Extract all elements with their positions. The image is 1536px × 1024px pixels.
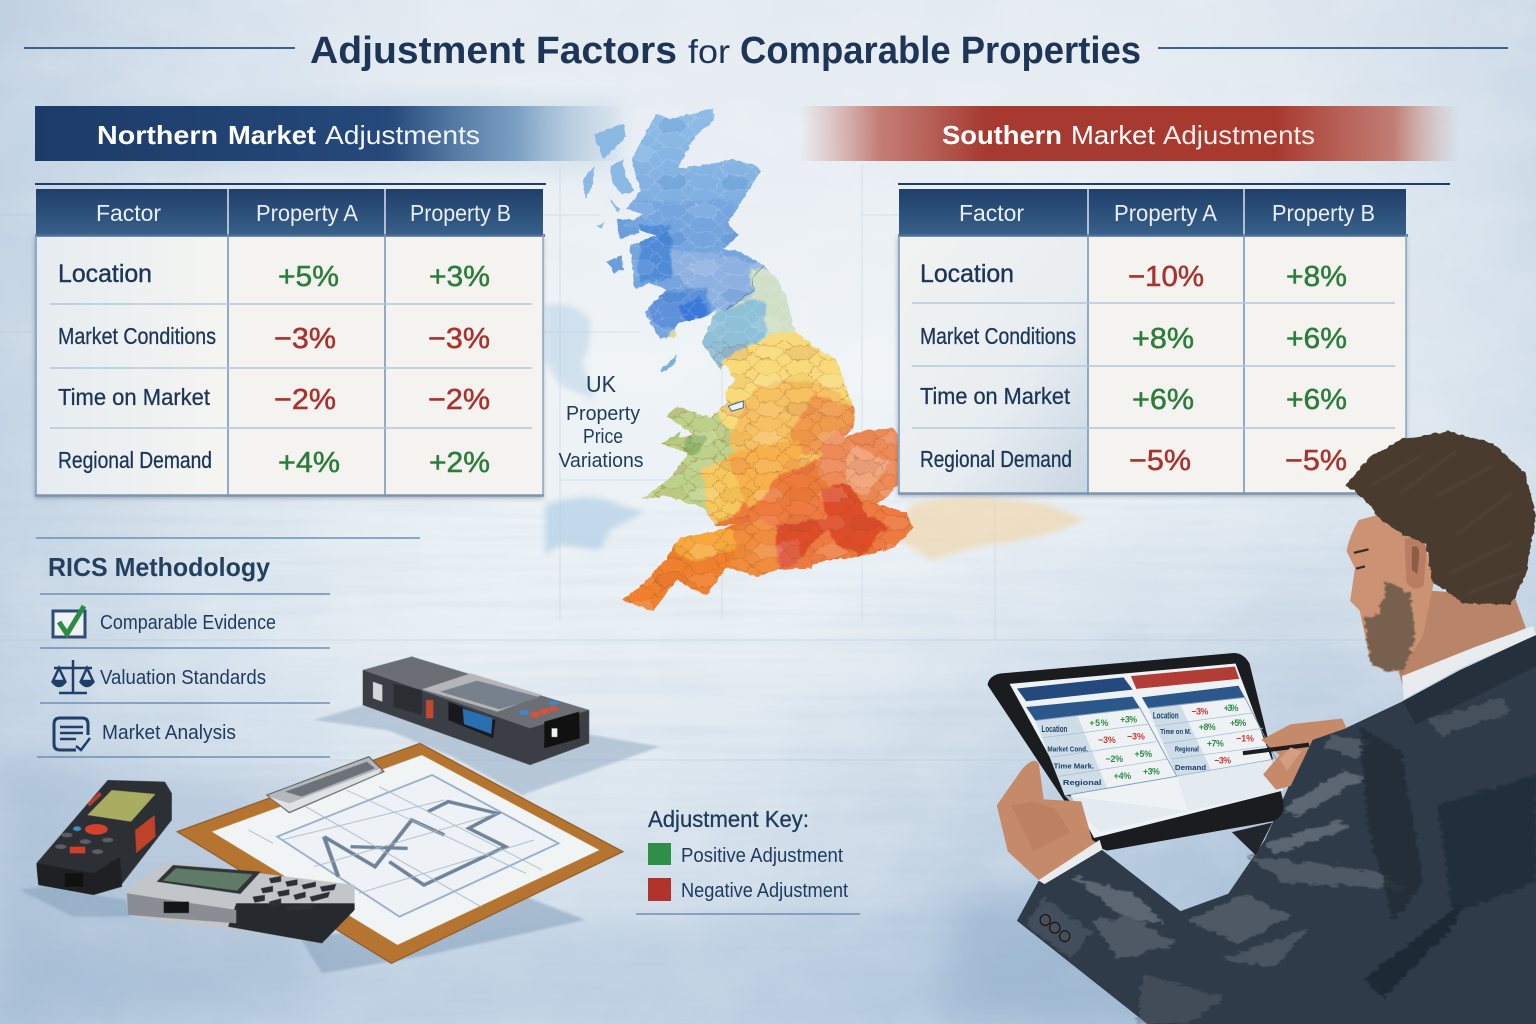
tablet screen: +8%	[1199, 722, 1216, 732]
banner: Northern Market Adjustments: Market	[228, 120, 316, 150]
shirt cuff	[1038, 840, 1103, 884]
tablet screen: Location	[1153, 710, 1179, 721]
row: Location: Location	[920, 260, 1014, 288]
banner: Southern Market Adjustments: Adjustments	[1163, 120, 1315, 150]
handheld device left	[36, 780, 172, 895]
row: Location: −10%	[1128, 261, 1204, 293]
tablet screen: +3%	[1120, 714, 1137, 724]
row: Regional Demand	[58, 447, 490, 479]
left hand	[997, 761, 1101, 880]
ireland and europe washes	[545, 304, 1085, 560]
map label: UK Property Price Variations: Price	[583, 426, 623, 448]
tablet screen: +4%	[1114, 771, 1131, 781]
county mesh	[624, 114, 911, 611]
row: Time on Market: +6%	[1132, 384, 1194, 416]
row: Location: +3%	[429, 261, 490, 293]
row: Time on Market	[920, 383, 1347, 416]
banner: Northern Market Adjustments: Adjustments	[325, 120, 480, 150]
panel: adjustment key: Positive Adjustment	[681, 845, 843, 867]
icon: scales	[52, 660, 94, 693]
tablet screen: −3%	[1127, 732, 1145, 742]
key swatch: negative	[648, 878, 671, 901]
panel: RICS methodology: RICS Methodology	[48, 552, 271, 582]
banner: Southern Market Adjustments	[800, 106, 1460, 161]
title: Adjustment Factors	[310, 30, 677, 72]
panel: RICS methodology	[36, 538, 420, 757]
table header	[898, 189, 1408, 236]
banner: Southern Market Adjustments: Southern	[942, 120, 1062, 150]
tablet screen: −2%	[1105, 754, 1123, 764]
tablet screen: Location	[1042, 724, 1067, 734]
shadows	[20, 703, 660, 973]
beard	[1364, 582, 1416, 672]
row: Regional Demand: +2%	[429, 447, 490, 479]
row: Market Conditions: −3%	[428, 323, 490, 355]
tablet screen: +7%	[1207, 738, 1224, 749]
key swatch: positive	[648, 843, 671, 865]
row: Location	[58, 260, 490, 293]
tablet screen: −3%	[1191, 706, 1208, 717]
row: Market Conditions: +6%	[1286, 323, 1347, 355]
row: Time on Market: +6%	[1286, 384, 1347, 416]
suit	[1017, 635, 1536, 1024]
table header: Factor	[959, 200, 1024, 226]
table header: Property B	[410, 200, 511, 226]
hair	[1346, 432, 1536, 605]
shirt collar	[1402, 626, 1536, 699]
row: Market Conditions: +8%	[1132, 323, 1194, 355]
tablet screen: +3%	[1224, 703, 1238, 713]
tablet screen	[1010, 663, 1283, 838]
tablet screen: Market Cond.	[1047, 744, 1088, 753]
table header: Property A	[256, 200, 359, 226]
tablet screen: Regional	[1063, 778, 1101, 787]
row: Location: +8%	[1286, 261, 1347, 293]
row: Time on Market: −2%	[274, 384, 336, 416]
tablet screen: +5%	[1135, 749, 1152, 759]
tablet screen: +3%	[1143, 766, 1160, 776]
row: Time on Market: −2%	[428, 384, 490, 416]
ear	[1405, 537, 1427, 589]
row: Location	[920, 260, 1347, 293]
row: Regional Demand	[920, 445, 1347, 477]
row: Location: Location	[58, 260, 152, 288]
banner: Northern Market Adjustments	[35, 106, 625, 161]
panel: adjustment key: Adjustment Key:	[648, 806, 809, 832]
panel: adjustment key: Negative Adjustment	[681, 880, 848, 902]
row: Market Conditions	[58, 323, 490, 355]
tablet screen: +5%	[1089, 718, 1108, 728]
illustration: man with tablet	[988, 432, 1536, 1024]
tablet screen: +5%	[1230, 718, 1246, 728]
banner: Northern Market Adjustments: Northern	[97, 120, 218, 150]
map label: UK Property Price Variations: Property	[566, 403, 640, 425]
row: Market Conditions: −3%	[274, 323, 336, 355]
row: Time on Market: Time on Market	[58, 384, 211, 410]
row: Time on Market: Time on Market	[920, 383, 1071, 409]
row: Regional Demand: −5%	[1285, 445, 1347, 477]
row: Market Conditions	[920, 323, 1347, 355]
table header	[35, 189, 545, 236]
panel: RICS methodology: Comparable Evidence	[100, 612, 276, 634]
panel: northern adjustments table	[35, 184, 546, 496]
tablet screen: Demand	[1175, 763, 1207, 772]
row: Regional Demand: −5%	[1129, 445, 1191, 477]
neck and face	[1347, 512, 1526, 686]
row: Time on Market	[58, 384, 490, 416]
icon: checkbox	[53, 606, 85, 637]
illustration: surveying tools and floor plan	[20, 657, 660, 973]
row: Market Conditions: Market Conditions	[58, 323, 216, 349]
tablet	[988, 653, 1284, 855]
panel: RICS methodology: Market Analysis	[102, 722, 236, 744]
panel: RICS methodology: Valuation Standards	[100, 667, 266, 689]
row: Location: +5%	[278, 261, 339, 293]
title: Comparable Properties	[740, 30, 1141, 72]
banner: Southern Market Adjustments: Market	[1071, 120, 1156, 150]
table header: Property A	[1114, 200, 1218, 226]
tablet screen: Time on M.	[1160, 727, 1191, 736]
clip	[267, 757, 384, 813]
panel: UK map	[545, 90, 1085, 621]
calculator device	[126, 862, 355, 943]
map label: UK Property Price Variations: UK	[586, 371, 617, 397]
row: Regional Demand: Regional Demand	[58, 447, 212, 473]
icon: document	[54, 718, 90, 750]
map label: UK Property Price Variations: Variations	[558, 450, 644, 472]
tablet screen: −3%	[1214, 755, 1231, 766]
panel: adjustment key	[636, 806, 860, 914]
title	[24, 30, 1508, 72]
tablet screen: Time Mark.	[1054, 761, 1094, 771]
clipboard with floor plan	[177, 743, 623, 963]
table header: Property B	[1272, 200, 1375, 226]
row: Regional Demand: +4%	[278, 447, 340, 479]
row: Regional Demand: Regional Demand	[920, 446, 1072, 472]
panel: southern adjustments table	[898, 184, 1450, 494]
row: Market Conditions: Market Conditions	[920, 323, 1076, 349]
map label: UK Property Price Variations	[558, 371, 644, 472]
laser measure top right	[363, 657, 589, 765]
table header: Factor	[96, 200, 161, 226]
scottish islands	[583, 124, 813, 569]
buttons	[1040, 915, 1070, 942]
right hand with pen	[1243, 719, 1347, 790]
tablet screen: Regional	[1175, 744, 1199, 753]
tablet screen: −3%	[1098, 735, 1116, 745]
tablet screen: −1%	[1236, 733, 1254, 744]
title: for	[688, 33, 730, 70]
